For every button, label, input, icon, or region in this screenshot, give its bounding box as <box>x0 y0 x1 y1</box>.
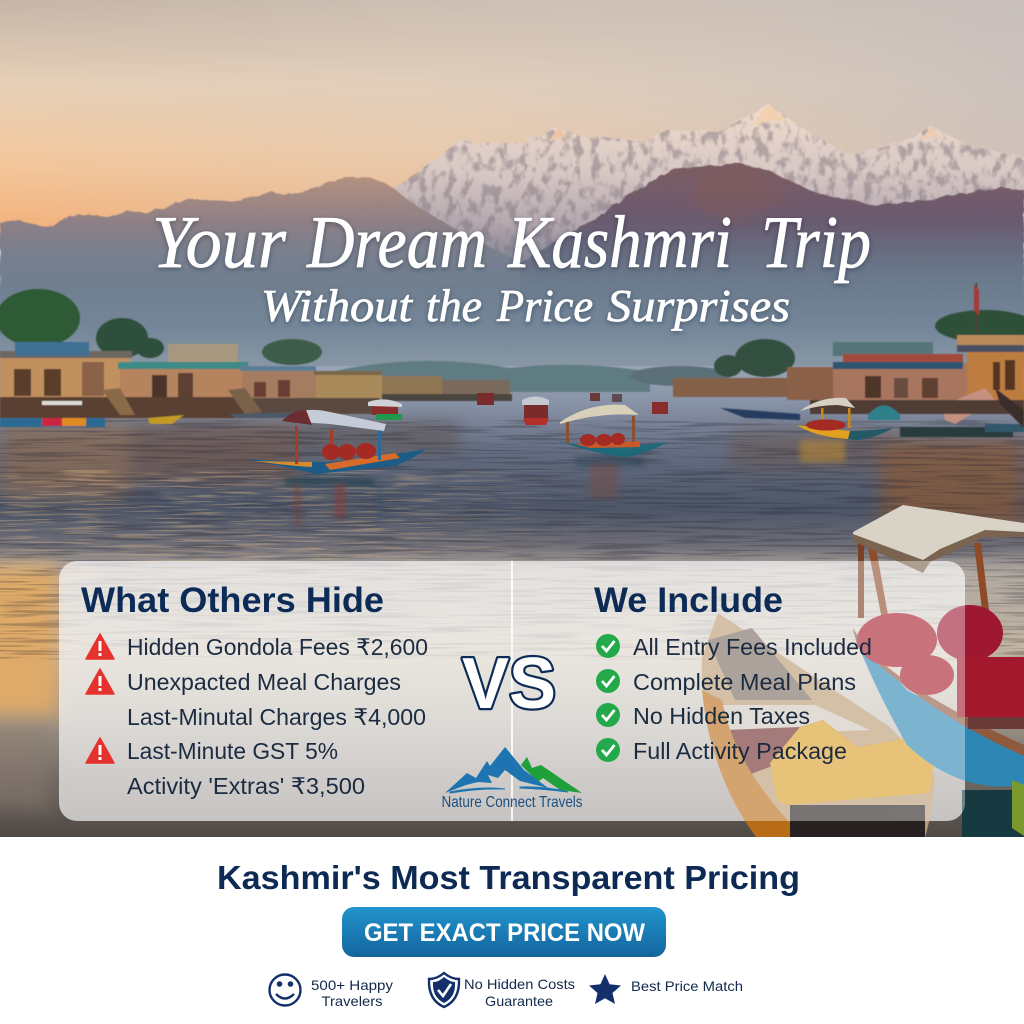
logo mountains <box>445 747 582 793</box>
check icon 1 <box>596 634 620 658</box>
boat reflections <box>285 440 845 526</box>
houseboats: right shore <box>630 283 1024 437</box>
title line 1: Kashmri <box>507 202 732 284</box>
heading: what others hide: What Others Hide <box>81 581 384 620</box>
icon: shield <box>429 973 459 1007</box>
full activity package: Full Activity Package <box>633 738 847 764</box>
badge: best price match: Best Price Match <box>631 978 743 994</box>
badge: no hidden costs: No Hidden Costs <box>464 976 575 992</box>
title line 1: Trip <box>761 202 871 284</box>
boat: wooden boat with yellow seat <box>702 613 957 838</box>
warning icon 3 <box>86 738 114 763</box>
last-minutal charges: Last-Minutal Charges ₹4,000 <box>127 704 426 730</box>
badge: no hidden costs <box>464 976 575 1009</box>
last-minute gst: Last-Minute GST 5% <box>127 738 338 764</box>
tagline: Kashmir's Most Transparent Pricing <box>217 859 800 896</box>
shikara boat: right <box>795 398 893 440</box>
title line 2: Price <box>496 280 593 331</box>
boat: red shikara <box>853 505 1024 836</box>
background: mountain range <box>0 104 1024 375</box>
logo name: Nature Connect Travels <box>442 794 582 811</box>
shore reflections <box>0 422 1024 810</box>
warning icon 1 <box>86 634 114 659</box>
badge: happy travelers: Travelers <box>322 993 382 1009</box>
check icon 4 <box>596 738 620 762</box>
shikara boat: centre right <box>550 405 668 457</box>
right column: we include <box>594 581 872 764</box>
logo: nature connect travels <box>442 747 582 811</box>
lake water <box>0 366 1024 838</box>
badge: happy travelers <box>311 977 393 1009</box>
all entry fees: All Entry Fees Included <box>633 634 872 660</box>
distant shikara boats <box>368 393 668 425</box>
title line 2: the <box>426 280 482 331</box>
icon: star <box>589 974 621 1004</box>
shikara boat: centre left <box>246 410 426 474</box>
heading: we include: We Include <box>594 581 783 620</box>
foreground boats <box>702 505 1024 838</box>
icon: smiley <box>270 974 300 1006</box>
panel background <box>59 561 965 821</box>
hidden gondola fees: Hidden Gondola Fees ₹2,600 <box>127 634 428 660</box>
houseboats: left shore <box>0 289 650 427</box>
vs badge: VS <box>462 644 556 724</box>
left column: what others hide <box>81 581 428 799</box>
title line 1: Dream <box>306 202 487 284</box>
complete meal plans: Complete Meal Plans <box>633 669 856 695</box>
comparison panel <box>59 561 1008 836</box>
check icon 3 <box>596 703 620 727</box>
check icon 2 <box>596 669 620 693</box>
vertical divider <box>511 561 513 821</box>
boats seen through the panel <box>702 561 965 821</box>
badge: happy travelers: 500+ Happy <box>311 977 393 993</box>
footer band <box>0 837 1024 1024</box>
title <box>152 202 871 331</box>
activity extras: Activity 'Extras' ₹3,500 <box>127 773 365 799</box>
title line 2: Without <box>261 280 413 331</box>
button: get exact price now: GET EXACT PRICE NOW <box>364 919 645 947</box>
badge: no hidden costs: Guarantee <box>485 993 553 1009</box>
dark water corner <box>962 790 1024 838</box>
background: sky <box>0 0 1024 240</box>
title line 2: Surprises <box>607 280 790 331</box>
button: get exact price now <box>342 907 666 957</box>
warning icon 2 <box>86 669 114 694</box>
title line 1: Your <box>152 202 287 284</box>
no hidden taxes: No Hidden Taxes <box>633 703 810 729</box>
unexpacted meal charges: Unexpacted Meal Charges <box>127 669 401 695</box>
